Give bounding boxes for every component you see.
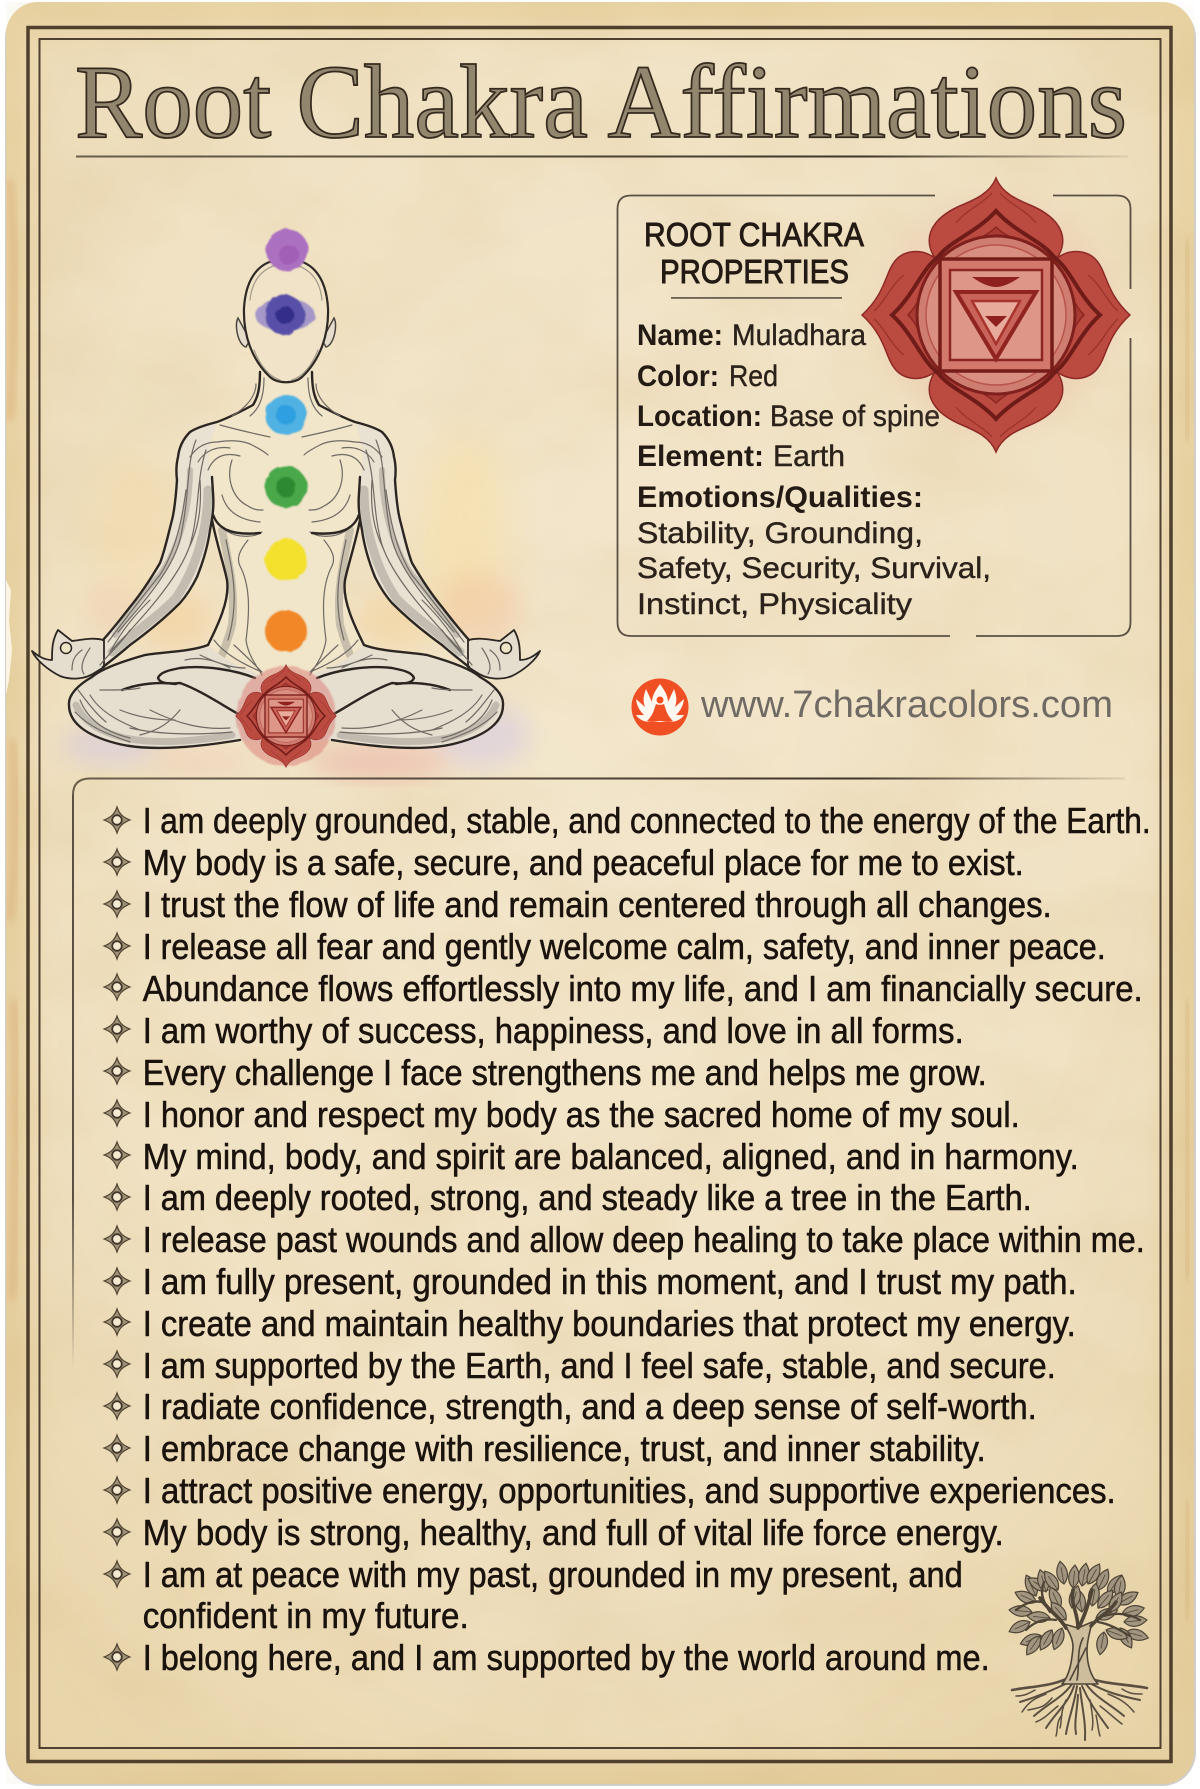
- property: color: Red: [729, 360, 778, 393]
- meditating figure: [32, 260, 540, 748]
- property: color: [637, 360, 778, 393]
- affirmations box outline: [72, 778, 1125, 1370]
- solar plexus chakra: [265, 539, 307, 581]
- properties heading: [644, 216, 864, 290]
- panel: properties: [618, 196, 1130, 636]
- property: location: Location:: [637, 400, 762, 433]
- throat chakra: [265, 395, 307, 435]
- affirmation 9: My mind, body, and spirit are balanced, aligned, and in harmony.: [143, 1136, 1079, 1177]
- property: location: Base of spine: [770, 400, 940, 433]
- affirmation 4: I release all fear and gently welcome calm, safety, and inner peace.: [143, 926, 1106, 967]
- affirmation 12: I am fully present, grounded in this moment, and I trust my path.: [143, 1261, 1077, 1302]
- property: emotions and qualities: Stability, Grounding,: [637, 517, 923, 550]
- affirmation 3: I trust the flow of life and remain centered through all changes.: [143, 884, 1052, 925]
- website logo: [632, 678, 688, 736]
- property: name: Muladhara: [732, 319, 866, 352]
- website address: www.7chakracolors.com: [700, 684, 1113, 726]
- affirmation 19: [104, 1554, 963, 1636]
- root chakra symbol on figure: [236, 665, 336, 767]
- chakra dots: [255, 229, 315, 652]
- icon: body right half: [286, 372, 540, 748]
- property: element: Earth: [773, 440, 845, 473]
- properties box outline: [618, 196, 1130, 636]
- affirmation 19: confident in my future.: [143, 1595, 469, 1636]
- affirmation 20: I belong here, and I am supported by the world around me.: [143, 1637, 990, 1678]
- affirmation 2: My body is a safe, secure, and peaceful place for me to exist.: [143, 842, 1024, 883]
- icon: body left half: [32, 372, 286, 748]
- affirmation 8: I honor and respect my body as the sacred home of my soul.: [143, 1094, 1020, 1135]
- property: emotions and qualities: Safety, Security, Survival,: [637, 552, 991, 585]
- property: element: Element:: [637, 440, 764, 473]
- property: name: Name:: [637, 319, 723, 352]
- heart chakra: [265, 466, 307, 508]
- affirmation 16: I embrace change with resilience, trust, and inner stability.: [143, 1428, 986, 1469]
- icon: head: [236, 260, 336, 382]
- affirmation 18: My body is strong, healthy, and full of vital life force energy.: [143, 1512, 1004, 1553]
- tree roots: [1012, 1676, 1147, 1740]
- properties heading: PROPERTIES: [660, 253, 849, 290]
- sacral chakra: [265, 610, 307, 652]
- tree leaves: [1007, 1560, 1150, 1658]
- affirmation 17: I attract positive energy, opportunities, and supportive experiences.: [143, 1470, 1116, 1511]
- properties heading: ROOT CHAKRA: [644, 216, 864, 253]
- watercolor wash behind figure: [60, 435, 530, 780]
- affirmation 13: I create and maintain healthy boundaries that protect my energy.: [143, 1303, 1076, 1344]
- title rule: [76, 156, 1128, 158]
- icon: large root chakra symbol: [862, 178, 1130, 452]
- affirmation 6: I am worthy of success, happiness, and love in all forms.: [143, 1010, 964, 1051]
- affirmation 7: Every challenge I face strengthens me and helps me grow.: [143, 1052, 987, 1093]
- property: emotions and qualities: Emotions/Qualities:: [637, 481, 923, 514]
- affirmation 15: I radiate confidence, strength, and a deep sense of self-worth.: [143, 1386, 1037, 1427]
- property: element: [637, 440, 845, 473]
- property: emotions and qualities: [637, 481, 991, 621]
- affirmation 14: I am supported by the Earth, and I feel safe, stable, and secure.: [143, 1345, 1056, 1386]
- tree trunk and branches: [1016, 1582, 1140, 1684]
- affirmation 10: I am deeply rooted, strong, and steady like a tree in the Earth.: [143, 1177, 1032, 1218]
- affirmation 19: I am at peace with my past, grounded in my present, and: [143, 1554, 963, 1595]
- panel: affirmations: [72, 778, 1151, 1678]
- heading rule: [671, 297, 842, 299]
- property: color: Color:: [637, 360, 719, 393]
- property: emotions and qualities: Instinct, Physicality: [637, 588, 912, 621]
- icon: tree of life: [1007, 1560, 1150, 1740]
- crown chakra: [266, 229, 308, 271]
- property: location: [637, 400, 940, 433]
- title: Root Chakra Affirmations: [75, 43, 1127, 160]
- third eye chakra: [255, 295, 315, 335]
- property: name: [637, 319, 866, 352]
